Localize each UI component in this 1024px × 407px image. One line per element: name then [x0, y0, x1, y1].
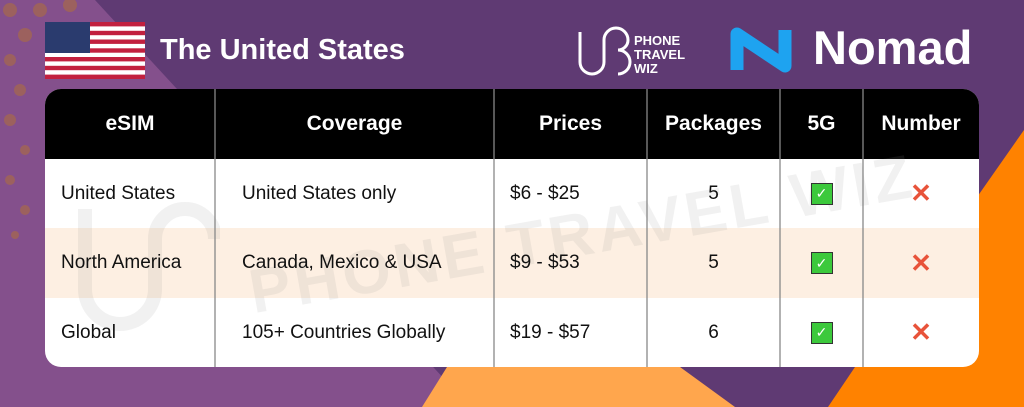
- row: United States: [61, 178, 932, 208]
- logo: Phone Travel Wiz: WIZ: [634, 61, 658, 76]
- row: Global: [61, 317, 932, 347]
- row: United States: United States: [61, 182, 175, 204]
- logo: Nomad: Nomad: [813, 21, 972, 74]
- table: [45, 89, 979, 367]
- header row: Number: [881, 112, 961, 135]
- row: Global: 6: [708, 322, 719, 342]
- logo: Nomad: [730, 21, 972, 74]
- header row: Coverage: [307, 112, 402, 135]
- row: United States: ✓: [816, 185, 827, 201]
- row: United States: ✕: [910, 178, 932, 208]
- row: North America: $9 - $53: [510, 252, 580, 273]
- row: North America: 5: [708, 252, 719, 273]
- logo: Phone Travel Wiz: [578, 26, 685, 76]
- header row: Prices: [539, 112, 602, 135]
- row: North America: [61, 248, 932, 278]
- icon: US flag: [45, 22, 145, 79]
- header row: eSIM: [105, 112, 154, 135]
- row: North America: Canada, Mexico & USA: [242, 252, 442, 273]
- row: North America: ✓: [816, 254, 827, 270]
- header row: 5G: [807, 112, 836, 135]
- row: Global: ✓: [816, 324, 827, 340]
- row: United States: 5: [708, 182, 719, 204]
- row: North America: North America: [61, 252, 181, 273]
- row: Global: 105+ Countries Globally: [242, 322, 445, 342]
- logo: Phone Travel Wiz: TRAVEL: [634, 47, 685, 62]
- row: North America: ✕: [910, 248, 932, 278]
- row: Global: $19 - $57: [510, 322, 590, 342]
- header row: Packages: [665, 112, 762, 135]
- row: Global: Global: [61, 322, 116, 342]
- logo: Phone Travel Wiz: PHONE: [634, 33, 680, 48]
- row: United States: United States only: [242, 182, 396, 204]
- title: The United States: [160, 34, 405, 66]
- header row: [105, 112, 961, 135]
- row: United States: $6 - $25: [510, 182, 580, 204]
- row: Global: ✕: [910, 317, 932, 347]
- watermark: PHONE TRAVEL WIZ: [244, 142, 921, 327]
